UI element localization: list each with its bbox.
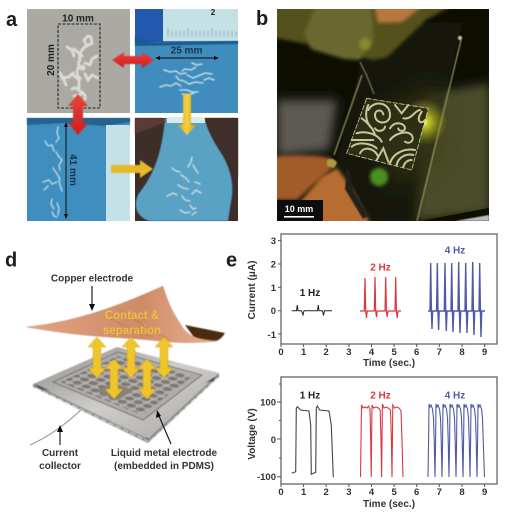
callout: liquid metal electrode: Liquid metal electrode xyxy=(111,448,218,459)
voltage x tick labels: 5 xyxy=(391,487,397,498)
voltage trace 4 Hz xyxy=(428,390,484,477)
photo: stretched vertically xyxy=(27,118,130,221)
current axis titles: Time (sec.) xyxy=(363,358,415,369)
current x tick labels: 1 xyxy=(301,347,307,358)
heading: contact & separation xyxy=(103,310,161,337)
voltage x tick labels xyxy=(278,487,487,498)
current trace 1 Hz: 1 Hz xyxy=(300,288,320,299)
ruler numbers and 25 mm dimension: 2 xyxy=(211,8,216,17)
current trace 4 Hz: 4 Hz xyxy=(445,246,465,256)
current x tick labels: 8 xyxy=(459,347,465,358)
current x tick labels: 0 xyxy=(278,347,284,358)
callout: copper electrode xyxy=(51,274,134,311)
ruler numbers and 25 mm dimension: 25 mm xyxy=(171,46,202,56)
photo: stretched biaxially xyxy=(135,118,238,221)
current x tick labels: 9 xyxy=(482,347,487,358)
scale bar box xyxy=(277,200,323,221)
voltage x tick labels: 4 xyxy=(369,487,375,498)
arrow: yellow down xyxy=(178,94,196,135)
voltage y tick labels xyxy=(257,398,276,483)
41 mm dimension: 41 mm xyxy=(67,154,78,186)
arrow: red horizontal double xyxy=(112,52,154,68)
photo background xyxy=(270,2,490,225)
voltage trace 1 Hz: 1 Hz xyxy=(300,390,320,402)
top finger xyxy=(277,9,453,62)
lit table surface xyxy=(415,83,490,221)
chart: current vs time: Current (μA) xyxy=(247,261,258,319)
current y tick labels: -1 xyxy=(268,330,277,341)
arrow: red vertical double xyxy=(68,94,88,135)
glass slide edges xyxy=(334,40,461,221)
photo: unstretched sample on grey xyxy=(27,9,130,113)
callout: current collector: Current xyxy=(42,448,79,459)
callout: liquid metal electrode: (embedded in PDMS) xyxy=(114,461,214,472)
current axis ticks xyxy=(278,241,485,347)
dark glass slide xyxy=(327,22,462,221)
heading: contact & separation: separation xyxy=(103,325,161,337)
current trace 2 Hz xyxy=(360,262,401,318)
current x tick labels: 5 xyxy=(391,347,397,358)
voltage axis titles: Time (sec.) xyxy=(363,499,415,510)
panel b: glowing device photo xyxy=(256,2,490,225)
patterned electrode xyxy=(347,98,428,170)
voltage x tick labels: 1 xyxy=(301,487,307,498)
voltage trace 4 Hz: 4 Hz xyxy=(445,390,465,402)
41 mm dimension xyxy=(64,122,78,219)
current x tick labels: 2 xyxy=(324,347,329,358)
copper electrode sheet xyxy=(27,286,225,343)
arrows: contact and separation xyxy=(88,337,173,399)
chart: voltage vs time xyxy=(247,377,497,510)
bottom fingers xyxy=(270,155,336,200)
panel a: stretchable electrode photos xyxy=(6,8,238,221)
voltage trace 2 Hz: 2 Hz xyxy=(370,390,391,402)
voltage x tick labels: 2 xyxy=(324,487,329,498)
scale bar xyxy=(284,204,314,218)
panel e: current and voltage charts xyxy=(226,234,497,510)
ruler numbers and 25 mm dimension xyxy=(155,8,219,60)
voltage x tick labels: 7 xyxy=(437,487,442,498)
heading: contact & separation: Contact & xyxy=(105,310,159,322)
scale bar: 10 mm xyxy=(285,204,313,214)
current y tick labels: 0 xyxy=(271,306,276,317)
callout: copper electrode: Copper electrode xyxy=(51,274,134,284)
voltage x tick labels: 8 xyxy=(459,487,465,498)
current collector wire xyxy=(30,409,82,445)
photo: stretched horizontally xyxy=(135,9,238,113)
callout: current collector: collector xyxy=(39,461,81,472)
panel label b: b xyxy=(256,8,268,30)
ruler ticks xyxy=(168,28,236,37)
voltage axis ticks xyxy=(277,384,485,487)
current trace 2 Hz: 2 Hz xyxy=(370,262,391,274)
voltage trace 2 Hz xyxy=(360,390,403,477)
dashed rectangle with dimensions xyxy=(46,14,100,108)
voltage y tick labels: -100 xyxy=(257,472,276,483)
voltage y tick labels: 0 xyxy=(271,435,276,446)
current y tick labels: 3 xyxy=(271,236,276,247)
panel label d: d xyxy=(5,250,17,272)
chart: current vs time xyxy=(247,234,497,369)
voltage trace 1 Hz xyxy=(292,390,333,477)
current y tick labels: 1 xyxy=(271,283,277,294)
voltage x tick labels: 0 xyxy=(278,487,284,498)
voltage x tick labels: 6 xyxy=(414,487,419,498)
current y tick labels: 2 xyxy=(271,260,276,270)
panel d: device schematic xyxy=(5,250,225,472)
chart: voltage vs time: Voltage (V) xyxy=(247,408,258,460)
current x tick labels: 3 xyxy=(346,347,352,358)
base plate xyxy=(33,347,219,443)
voltage x tick labels: 9 xyxy=(482,487,487,498)
glow spots xyxy=(410,98,446,144)
table corner xyxy=(420,208,489,221)
current y tick labels xyxy=(268,236,277,341)
current trace 4 Hz xyxy=(428,246,485,337)
callout: current collector xyxy=(39,425,81,472)
dashed rectangle with dimensions: 10 mm xyxy=(62,14,94,24)
callout: liquid metal electrode xyxy=(111,410,218,472)
current trace 1 Hz xyxy=(292,288,332,316)
current x tick labels: 7 xyxy=(437,347,442,358)
current x tick labels: 4 xyxy=(369,347,375,358)
dashed rectangle with dimensions: 20 mm xyxy=(46,44,57,76)
voltage y tick labels: 100 xyxy=(260,398,276,408)
voltage x tick labels: 3 xyxy=(346,487,352,498)
arrow: yellow right xyxy=(111,160,153,178)
current x tick labels xyxy=(278,347,487,358)
panel label e: e xyxy=(226,250,237,272)
panel label a: a xyxy=(6,9,18,31)
current x tick labels: 6 xyxy=(414,347,419,358)
